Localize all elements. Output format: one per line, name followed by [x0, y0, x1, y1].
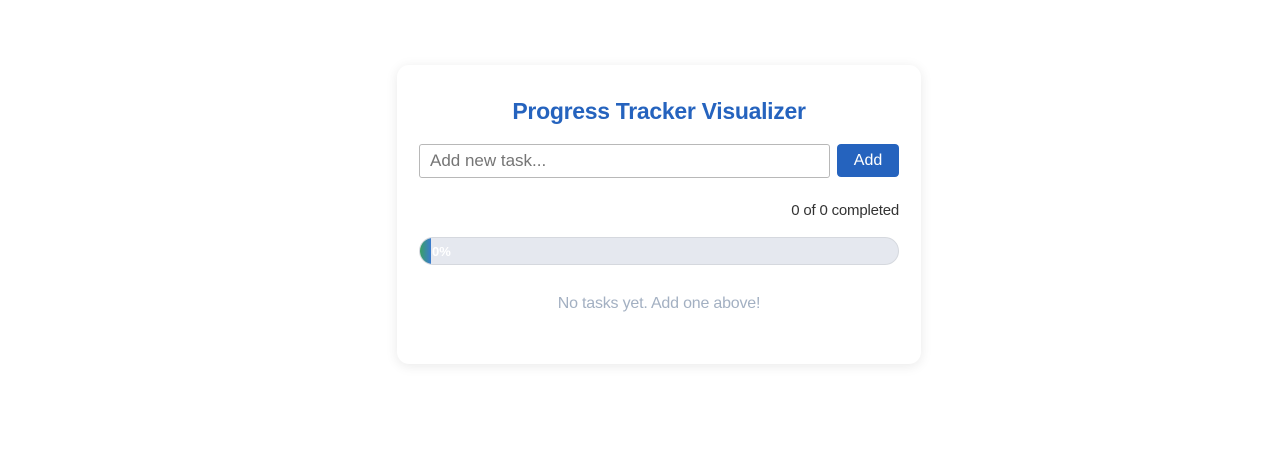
empty state message: No tasks yet. Add one above! — [558, 295, 760, 312]
add button: Add — [854, 152, 882, 169]
panel: card — [397, 65, 921, 364]
progress bar — [419, 237, 899, 265]
title: Progress Tracker Visualizer — [512, 98, 806, 124]
add button — [837, 144, 899, 177]
input field — [419, 144, 830, 178]
input field: Add new task... — [430, 151, 546, 170]
completed count: 0 of 0 completed — [791, 202, 899, 219]
progress bar: 0% — [432, 244, 451, 259]
